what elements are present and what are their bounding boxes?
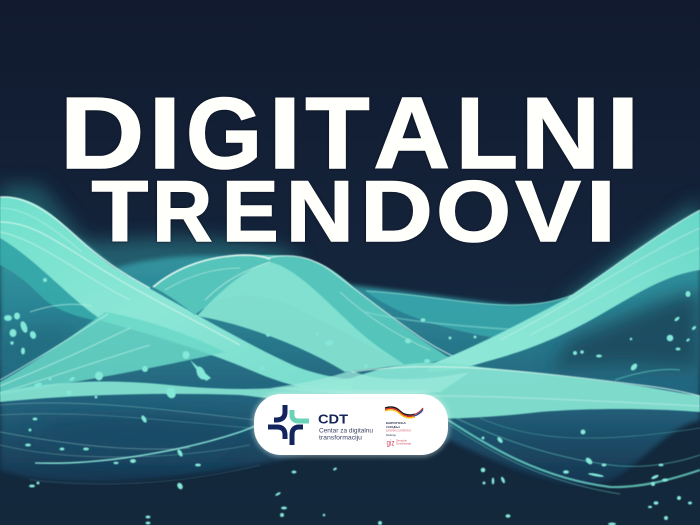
title line: TRENDOVI: D <box>360 163 433 260</box>
title line: DIGITALNI: I <box>606 77 640 190</box>
title line: DIGITALNI: A <box>374 77 450 190</box>
soft glow behind the waves <box>0 185 700 330</box>
title line: TRENDOVI: T <box>92 163 148 260</box>
wave: horizontal band across the right <box>0 363 700 494</box>
title line: DIGITALNI: I <box>268 78 301 190</box>
wave: left crossing strands <box>0 304 290 484</box>
title line: TRENDOVI: N <box>286 164 354 260</box>
glow particles <box>4 278 697 525</box>
title line: TRENDOVI <box>92 162 616 260</box>
title line: DIGITALNI: N <box>521 77 600 190</box>
dark hollows in the waves <box>0 290 700 459</box>
title line: TRENDOVI: I <box>586 163 616 260</box>
title line: TRENDOVI: E <box>222 163 279 260</box>
icon: giz logo: Gesellschaft <box>396 442 411 446</box>
wave: central hills <box>153 255 460 372</box>
wave: right back hill <box>365 291 572 338</box>
title line: DIGITALNI <box>60 77 640 191</box>
icon: giz logo: giz <box>386 438 394 448</box>
icon: giz logo: Deutsche <box>396 440 408 442</box>
title line: DIGITALNI: D <box>60 78 144 190</box>
logo subtitle: transformaciju <box>319 434 362 442</box>
title line: DIGITALNI: G <box>186 78 262 191</box>
partner text: Evropska saradnja: ЕВРОПСКА <box>386 421 407 425</box>
title line: TRENDOVI: V <box>516 162 581 260</box>
logo subtitle: Centar za digitalnu <box>319 428 373 434</box>
icon: giz logo <box>386 438 411 448</box>
icon: CDT cross logo <box>268 405 309 445</box>
partner text: Evropska saradnja: Realizuje <box>386 433 396 437</box>
logo pill <box>252 392 450 457</box>
title line: TRENDOVI: O <box>436 164 511 260</box>
title line: DIGITALNI: I <box>148 78 181 190</box>
partner text: Evropska saradnja: САРАДЊА <box>386 425 401 429</box>
wave field: deep teal body <box>0 200 700 485</box>
wave: right ascending ribbon <box>425 210 700 372</box>
wave: left main ribbon <box>0 197 355 394</box>
title line: TRENDOVI: R <box>152 163 212 260</box>
title line: DIGITALNI: T <box>305 77 370 190</box>
title line: DIGITALNI: L <box>456 77 518 190</box>
logo subtitle <box>319 428 373 442</box>
logo wordmark: CDT <box>318 412 348 426</box>
partner text: Evropska saradnja: EUROPEAN COOPERATION <box>386 428 411 432</box>
title <box>60 77 640 260</box>
partner text: Evropska saradnja <box>386 421 411 437</box>
icon: German and Serbian flag ribbon <box>385 407 423 418</box>
